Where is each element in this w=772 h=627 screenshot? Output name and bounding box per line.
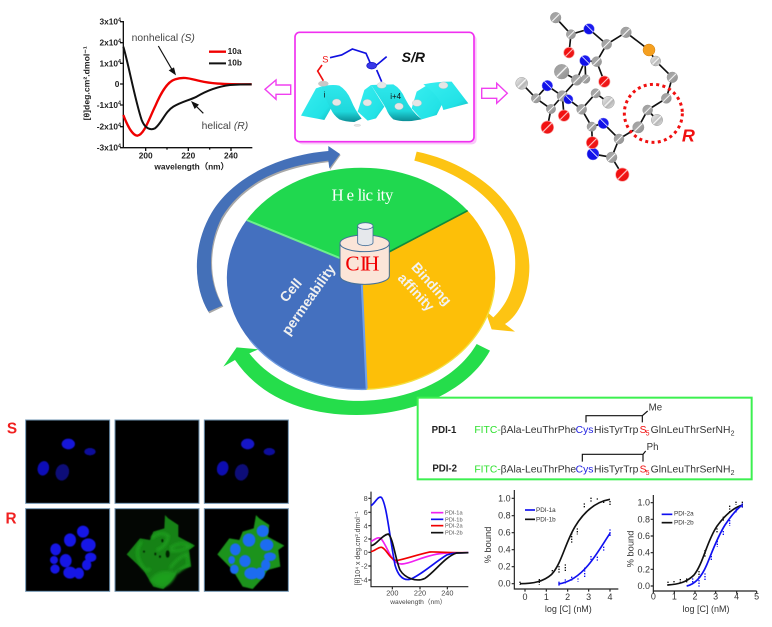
label: Helicity: Helicity [332,186,394,205]
y tick labels: 1x10 [99,58,118,68]
y axis title: [θ]10⁴ x deg.cm².dmol⁻¹ [355,511,362,585]
tick labels: 1.0 [637,498,650,508]
panel: R blue channel [26,509,110,591]
curve 10a [123,78,252,136]
arrow: green [223,344,490,415]
PDI-2 sequence: Ph [647,442,658,453]
arrow: blue [197,146,341,313]
x tick labels: 220 [181,151,196,161]
PDI-2 sequence: GlnLeuThrSerNH [651,464,730,475]
legend: PDI-1b [445,517,463,523]
S atom label: S [322,55,328,65]
panel: R green channel [115,509,199,591]
tick labels: 0.2 [498,562,511,572]
y tick labels: 4 [364,521,368,530]
x tick labels [139,151,238,171]
pie chart [227,168,495,389]
PDI-1 sequence: Cys [576,425,593,436]
PDI-2 sequence [432,442,735,477]
PDI-1 sequence: GlnLeuThrSerNH [651,425,730,436]
y tick labels: 4 [118,143,121,149]
residue labels [323,91,402,101]
label: S: S [7,421,17,438]
tick labels: 4 [734,592,739,602]
y tick labels [361,494,368,585]
y axis title: % bound [483,527,493,563]
y tick labels: -2x10 [97,122,118,132]
legend: PDI-1a [445,511,463,517]
tick labels: 0 [522,592,527,602]
x tick labels: wavelength（nm） [153,161,229,171]
PDI-1 sequence: 5 [646,431,650,438]
annotation helical: helical (R) [202,121,248,132]
PDI-1 sequence [432,403,735,438]
segment: cell permeability [227,220,367,389]
x tick labels: 240 [441,589,453,598]
binding curve: PDI-1 [483,490,618,614]
binding curve: PDI-2 [626,495,759,614]
residue labels: i [323,91,325,100]
legend: 10a [228,46,242,56]
y axis title: % bound [626,531,636,567]
arrow: yellow [414,152,529,332]
tick labels [498,493,612,614]
tick labels: 0.0 [637,581,650,591]
tick labels: 5 [754,592,759,602]
y tick labels: 4 [118,122,121,128]
panel: peptide sequences [418,398,752,479]
tick labels: 0.6 [498,528,511,538]
tick labels: 1 [544,592,549,602]
tick labels: log [C] (nM) [545,604,592,614]
legend [431,511,463,537]
curve PDI-2b with points [667,502,742,586]
y tick labels: 6 [364,508,368,517]
x tick labels: wavelength（nm） [389,598,446,606]
x tick labels: 240 [224,151,238,161]
segment: helicity [247,168,468,267]
tick labels: log [C] (nM) [683,604,729,614]
label: R: R [5,510,17,527]
x tick labels: 220 [414,589,426,598]
y tick labels: -4 [361,576,368,585]
arrow: pink pointing left [265,80,291,99]
label: Cell permeability: Cell [276,275,305,305]
y tick labels: -1x10 [97,100,118,110]
tick labels: 0.2 [637,564,650,574]
y tick labels: 4 [118,101,121,107]
y tick labels: 4 [118,38,121,44]
y tick labels: 8 [364,494,368,503]
carbon atoms [516,12,678,163]
y tick labels: 3x10 [99,17,118,27]
panel: S green channel [115,420,199,503]
PDI-2 sequence: Cys [576,464,593,475]
R label: R [682,125,695,145]
tick labels: 2 [565,592,570,602]
x tick labels [386,589,453,606]
arrow: pink pointing right [482,83,507,103]
legend: PDI-1a [536,507,556,514]
y tick labels: 2x10 [99,38,118,48]
tick labels: 0.8 [498,511,511,521]
y tick labels: -3x10 [97,143,118,153]
legend: PDI-2b [674,520,694,527]
PDI-2 sequence: 5 [646,470,650,477]
residue labels: i+4 [390,92,402,101]
panel: S blue channel [26,420,110,503]
staple chain [318,49,387,82]
y tick labels: 2 [364,535,368,544]
cylinder: CIH [340,223,389,284]
annotation nonhelical [132,33,195,75]
tick labels: 3 [586,592,591,602]
tick labels: 0.8 [637,514,650,524]
tick labels: 4 [607,592,612,602]
tick labels: 0.4 [637,548,650,558]
PDI-1 sequence: βAla-LeuThrPhe [501,425,576,436]
x tick labels: 200 [386,589,398,598]
legend [662,511,694,527]
label: Binding affinity: Binding [408,259,455,308]
curve 10b [123,47,252,129]
PDI-1 sequence: FITC- [474,425,501,436]
PDI-2 sequence: HisTyrTrp [594,464,639,475]
PDI-2 sequence: PDI-2 [432,464,457,475]
S/R label: S/R [402,49,425,65]
legend: 10b [228,58,242,68]
curve PDI-1b with points [520,498,610,585]
PDI-2 sequence: FITC- [474,464,501,475]
tick labels: 0 [651,592,656,602]
y tick labels: -2 [361,562,368,571]
PDI-1 sequence: Me [649,403,662,414]
tick labels: 0.6 [637,531,650,541]
legend [209,46,242,68]
y axis title: [θ]deg.cm².dmol⁻¹ [81,46,91,120]
CD chart: PDI peptides [355,492,468,606]
tick labels [637,498,759,614]
legend [525,507,556,523]
y tick labels: 4 [118,59,121,65]
legend: PDI-2a [445,524,463,530]
confocal microscopy panels [5,420,288,591]
PDI-1 sequence: S [640,425,647,436]
PDI-2 sequence: S [640,464,647,475]
sulfur atom [643,44,655,56]
x tick labels: 200 [139,151,153,161]
legend: PDI-2a [674,511,694,518]
oxygen atoms [541,47,629,181]
PDI-2 sequence: 2 [731,470,735,477]
PDI-1 sequence: HisTyrTrp [594,425,639,436]
crystal structure [516,12,695,181]
curve PDI-2a with points [687,503,742,587]
dotted circle [624,84,682,142]
residue markers [318,81,448,126]
label: Binding affinity [395,259,455,314]
tick labels: 0.0 [498,579,511,589]
tick labels: 2 [692,592,697,602]
label: Binding affinity: affinity [395,270,438,314]
cylinder: CIH: CIH [345,251,379,275]
annotation nonhelical: nonhelical (S) [132,33,195,44]
legend: PDI-1b [536,516,556,523]
y tick labels: 0 [115,79,120,89]
PDI-1 sequence: 2 [731,431,735,438]
y tick labels: 0 [364,548,368,557]
CD chart: nonhelical vs helical [81,17,252,171]
panel: staple helix [295,32,477,144]
label: Cell permeability: permeability [278,261,339,338]
panel: R merged [204,509,288,591]
panel: S merged [204,420,288,503]
tick labels: 3 [713,592,718,602]
PDI-1 sequence: PDI-1 [432,425,457,436]
y tick labels [97,17,121,153]
helix ribbon [301,82,468,122]
nitrogen atoms [542,24,609,160]
legend: PDI-2b [445,531,463,537]
tick labels: 1.0 [498,493,511,503]
central CIH diagram [197,146,529,415]
annotation helical [191,101,248,132]
tick labels: 1 [672,592,677,602]
segment: binding affinity [361,211,495,389]
PDI-2 sequence: βAla-LeuThrPhe [501,464,576,475]
y tick labels: 4 [118,17,121,23]
curves [371,497,468,580]
curve PDI-1a with points [558,529,610,586]
tick labels: 0.4 [498,545,511,555]
